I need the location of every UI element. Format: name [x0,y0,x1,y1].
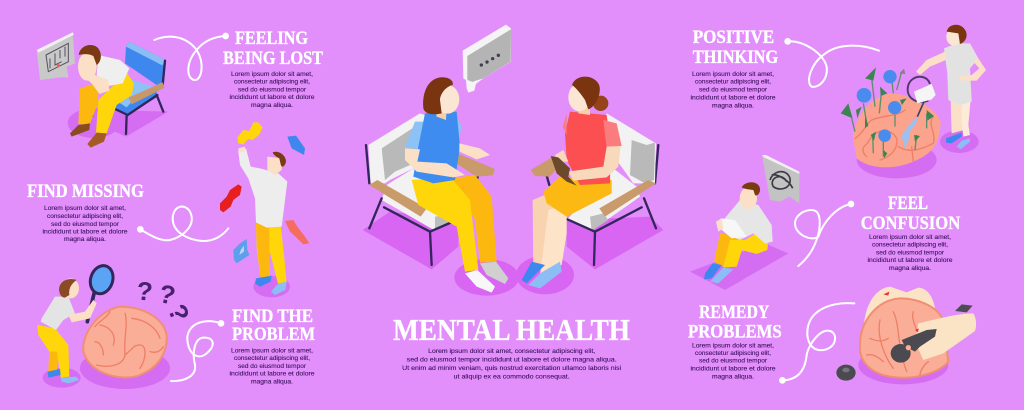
icon: cuff [955,304,973,312]
icon: nut [836,365,856,381]
text block: positive thinking [690,71,776,109]
left woman [405,77,508,293]
illustration: woman watering flowers on a brain [841,25,986,178]
illustration: person inspecting brain with magnifier [37,263,196,389]
text block: find the problem: consectetur adipiscing elit, [234,355,310,362]
heading: feel confusion: CONFUSION [861,213,960,234]
right chair [531,113,658,265]
person [37,278,97,383]
text block: remedy problems: consectetur adipiscing elit, [695,350,771,357]
icon: pliers [891,329,937,363]
right woman [522,77,622,288]
icon: magnifier [87,263,117,322]
icon: question marks: ? [162,300,196,326]
text block: feel confusion: magna aliqua. [889,265,931,272]
curve: feeling being lost connector [154,33,229,80]
text block: find the problem: magna aliqua. [251,379,293,386]
floor shadow [253,276,290,297]
text block: main description: sed do eiusmod tempor incididunt ut labore et dolore magna aliqua. [407,356,617,364]
heading: feeling being lost [223,28,323,69]
heading: remedy problems: PROBLEMS [688,322,782,343]
text block: find missing: magna aliqua. [64,236,106,243]
illustration: confused man sitting on mat [690,155,799,290]
curve: feel confusion connector [795,201,854,266]
icon: maze screen [37,32,75,80]
illustration: two women in therapy session [363,25,663,296]
heading: positive thinking: POSITIVE [693,27,774,48]
icon: yellow puzzle piece [237,122,263,144]
text block: feeling being lost [230,71,315,109]
illustration: person holding puzzle pieces [220,122,309,297]
text block: find the problem [230,347,315,386]
text block: main description: ut aliquip ex ea commodo consequat. [454,373,570,380]
chair [92,42,166,134]
heading: feeling being lost: FEELING [235,28,308,49]
heading: find the problem: PROBLEM [232,324,315,345]
icon: tablet [551,156,577,186]
heading: feel confusion: FEEL [888,193,928,214]
icon: brain [860,298,948,378]
shadow [43,348,170,389]
floor shadows [363,212,663,296]
person [238,147,287,295]
heading: find the problem: FIND THE [232,306,313,327]
text block: feeling being lost: magna aliqua. [251,102,293,109]
text block: feel confusion: Lorem ipsum dolor sit amet, [869,234,951,241]
curve: find the problem connector [171,320,224,381]
text block: remedy problems: Lorem ipsum dolor sit amet, [692,342,774,349]
heading: remedy problems: REMEDY [699,302,770,323]
curve: remedy problems connector [779,303,854,384]
text block: feeling being lost: incididunt ut labore et dolore [230,94,315,101]
icon: coral puzzle piece [285,220,309,244]
text block: feel confusion: incididunt ut labore et dolore [868,257,953,264]
shadow [858,346,948,384]
text block: find missing: sed do eiusmod tempor [51,221,120,228]
text block: feeling being lost: consectetur adipiscing elit, [234,79,310,86]
text block: positive thinking: Lorem ipsum dolor sit amet, [692,71,774,78]
flowers [841,67,934,158]
text block: remedy problems [690,342,776,381]
text block: find missing [42,205,128,243]
icon: brain [853,93,941,167]
icon: pale blue puzzle piece [233,239,249,263]
bandage skin [864,287,935,323]
icon: scribble bubble [762,155,799,203]
icon: question marks [135,275,196,326]
text block: remedy problems: magna aliqua. [712,374,754,381]
curve: positive thinking connector [784,38,879,87]
text block: find the problem: incididunt ut labore et dolore [230,371,315,378]
heading: remedy problems [688,302,782,343]
heading: positive thinking: THINKING [693,47,778,68]
text block: main description: Lorem ipsum dolor sit amet, consectetur adipiscing elit, [428,348,595,355]
text block: remedy problems: incididunt ut labore et dolore [690,366,776,373]
text block: find the problem: Lorem ipsum dolor sit amet, [231,347,313,354]
text block: find missing: incididunt ut labore et dolore [42,229,128,236]
text block: positive thinking: consectetur adipiscing elit, [695,79,771,86]
text block: main description [402,348,621,380]
text block: remedy problems: sed do eiusmod tempor [699,358,768,365]
text block: find missing: consectetur adipiscing elit, [47,213,123,220]
text block: feel confusion: consectetur adipiscing elit, [872,242,948,249]
text block: positive thinking: magna aliqua. [712,102,754,109]
left chair [366,113,495,265]
text block: find missing: Lorem ipsum dolor sit amet, [44,205,126,212]
text block: feeling being lost: Lorem ipsum dolor sit amet, [231,71,313,78]
main title: MENTAL HEALTH [393,312,630,347]
floor shadow [68,108,168,138]
woman [916,25,986,149]
heading: feel confusion [861,193,960,234]
heading: positive thinking [693,27,778,68]
mat [690,243,788,290]
text block: positive thinking: incididunt ut labore et dolore [690,95,776,102]
heading: feeling being lost: BEING LOST [223,48,323,69]
icon: brain [83,307,167,377]
heading: find missing: FIND MISSING [27,181,144,202]
illustration: person feeling lost on a chair with maze screen [37,32,168,148]
man [704,182,773,283]
icon: hand [915,313,976,360]
text block: main description: Ut enim ad minim veniam, quis nostrud exercitation ullamco laboris nisi [402,365,621,372]
icon: question marks: ? [156,278,178,311]
icon: blue puzzle piece [287,136,305,155]
text block: find the problem: sed do eiusmod tempor [238,363,307,370]
person [70,45,134,148]
heading: find the problem [232,306,315,345]
shadow [857,130,979,178]
icon: speech bubble [463,25,511,93]
icon: question marks: ? [135,275,154,307]
icon: garden fork and can [902,77,936,148]
illustration: hand repairing brain with pliers [836,287,976,384]
curve: find missing connector [137,207,228,241]
text block: positive thinking: sed do eiusmod tempor [699,87,768,94]
text block: feeling being lost: sed do eiusmod tempor [238,86,307,93]
text block: feel confusion [868,234,953,272]
icon: red puzzle piece [220,184,242,212]
text block: feel confusion: sed do eiusmod tempor [876,249,945,256]
